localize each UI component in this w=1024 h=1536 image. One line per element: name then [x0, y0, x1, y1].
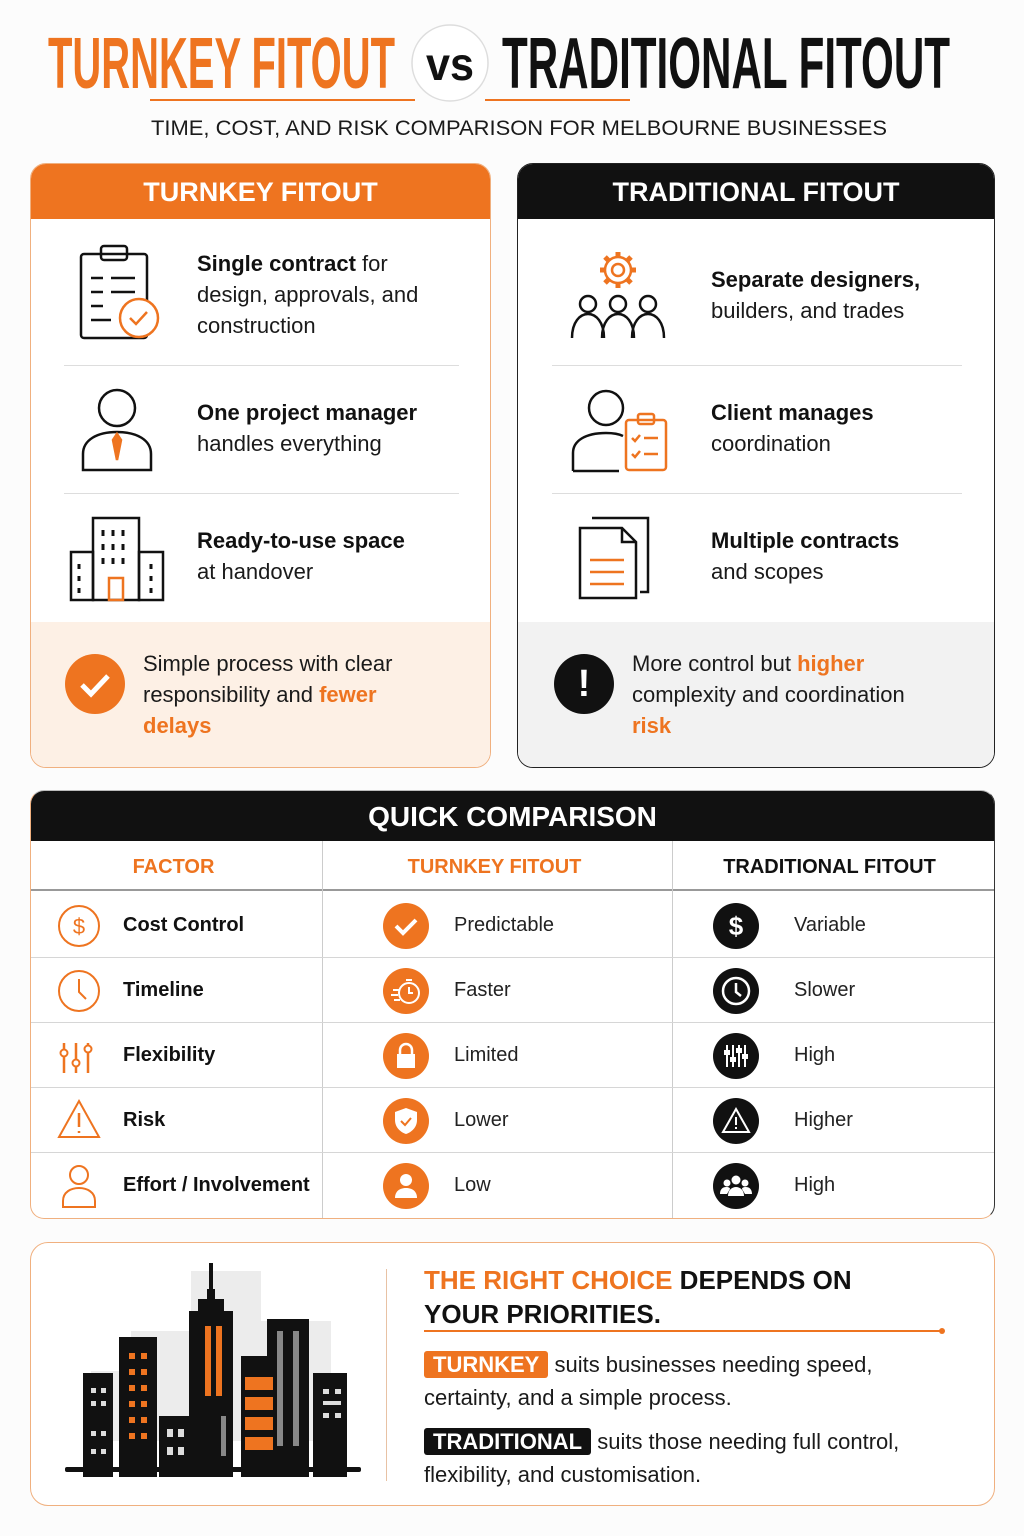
title: turnkey: TURNKEY FITOUT — [48, 24, 395, 104]
header: QUICK COMPARISON — [368, 801, 657, 832]
text: builders, and trades — [711, 298, 904, 323]
quick comparison table: Timeline — [123, 979, 204, 1001]
quick comparison table: Cost Control — [123, 914, 244, 936]
quick comparison table: High — [794, 1044, 835, 1066]
heading: YOUR PRIORITIES. — [424, 1299, 661, 1329]
text — [711, 528, 899, 584]
quick comparison table: Faster — [454, 979, 511, 1001]
quick comparison table: Slower — [794, 979, 855, 1001]
text: turnkey — [424, 1351, 872, 1410]
icon: team — [570, 252, 666, 338]
text: coordination — [711, 431, 831, 456]
vs badge: vs — [426, 38, 474, 90]
column headers: TRADITIONAL FITOUT — [723, 856, 936, 878]
column headers: FACTOR — [133, 856, 214, 878]
bottom panel: right choice — [30, 1242, 995, 1506]
text — [197, 251, 418, 338]
text: at handover — [197, 559, 313, 584]
quick comparison table: Effort / Involvement — [123, 1174, 310, 1196]
quick comparison table: Variable — [794, 914, 866, 936]
heading — [424, 1265, 852, 1329]
summary box: delays — [143, 713, 212, 738]
text: Multiple contracts — [711, 528, 899, 553]
heading: THE RIGHT CHOICE DEPENDS ON — [424, 1265, 852, 1295]
text: turnkey: TURNKEY suits businesses needing speed, — [433, 1352, 872, 1377]
text: construction — [197, 313, 316, 338]
icon: check — [65, 654, 125, 714]
vs badge — [412, 25, 488, 101]
header: TRADITIONAL FITOUT — [612, 177, 899, 207]
summary box — [31, 622, 490, 769]
turnkey icons — [383, 903, 429, 949]
panel: traditional — [517, 163, 995, 768]
traditional icons: $ — [729, 911, 743, 941]
icon: contract — [80, 244, 160, 340]
text: traditional: flexibility, and customisation. — [424, 1462, 701, 1487]
header — [31, 164, 490, 219]
quick comparison table: Risk — [123, 1109, 165, 1131]
text — [711, 400, 874, 456]
icon: documents — [578, 516, 650, 600]
quick comparison table: Limited — [454, 1044, 518, 1066]
column headers — [133, 856, 936, 878]
icon: exclamation — [554, 654, 614, 714]
icon: exclamation: ! — [578, 663, 590, 705]
summary box: risk — [632, 713, 671, 738]
text: One project manager — [197, 400, 417, 425]
factor icons: $ — [73, 914, 85, 939]
header — [31, 791, 994, 841]
quick comparison table: Low — [454, 1174, 491, 1196]
icon: building — [70, 516, 164, 602]
icon: manager — [82, 388, 152, 472]
text: traditional: TRADITIONAL suits those needing full control, — [433, 1429, 899, 1454]
icon: client clipboard — [572, 390, 668, 472]
summary box: complexity and coordination — [632, 682, 905, 707]
summary box: Simple process with clear — [143, 651, 392, 676]
text — [197, 528, 405, 584]
text: Ready-to-use space — [197, 528, 405, 553]
column headers: TURNKEY FITOUT — [408, 856, 581, 878]
traditional icons — [713, 903, 759, 949]
text: handles everything — [197, 431, 382, 456]
title — [48, 24, 950, 104]
text: design, approvals, and — [197, 282, 418, 307]
quick comparison table: Lower — [454, 1109, 508, 1131]
header — [518, 164, 994, 219]
quick comparison table: High — [794, 1174, 835, 1196]
text: Single contract for — [197, 251, 388, 276]
quick comparison table: Flexibility — [123, 1044, 215, 1066]
icon: city skyline — [65, 1263, 361, 1477]
quick comparison table: Predictable — [454, 914, 554, 936]
subtitle: TIME, COST, AND RISK COMPARISON FOR MELBOURNE BUSINESSES — [151, 117, 887, 140]
summary box — [518, 622, 994, 769]
quick comparison table — [30, 790, 995, 1219]
text — [711, 267, 920, 323]
summary box: More control but higher — [632, 651, 864, 676]
header: TURNKEY FITOUT — [143, 177, 378, 207]
text: turnkey: certainty, and a simple process. — [424, 1385, 732, 1410]
text: traditional — [424, 1428, 899, 1487]
panel: turnkey — [30, 163, 491, 768]
text: and scopes — [711, 559, 824, 584]
summary box: responsibility and fewer — [143, 682, 377, 707]
text: Separate designers, — [711, 267, 920, 292]
quick comparison table: Higher — [794, 1109, 853, 1131]
text: Client manages — [711, 400, 874, 425]
factor icons — [57, 905, 101, 1208]
text — [197, 400, 417, 456]
